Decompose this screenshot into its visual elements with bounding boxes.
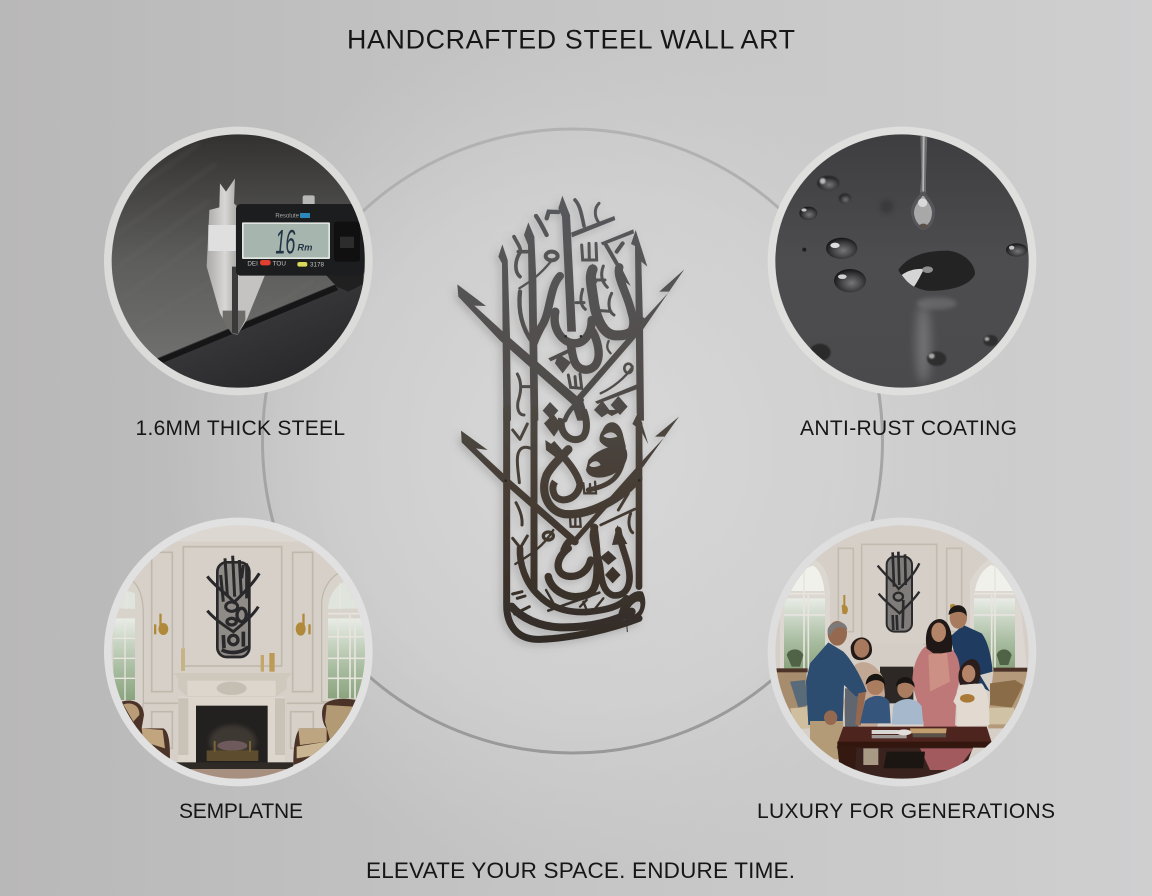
connecting ring behind the product	[262, 129, 882, 753]
mother	[912, 619, 963, 768]
label: semplatne: SEMPLATNE	[179, 800, 303, 823]
photo: family in living room	[760, 515, 1047, 795]
panel: anti-rust coating	[760, 120, 1047, 440]
mini artwork	[207, 556, 259, 657]
meem	[618, 591, 645, 621]
girl	[953, 659, 989, 727]
sofas	[776, 669, 807, 728]
caliper readout: 16	[275, 223, 295, 261]
calligraphy wall art	[457, 196, 684, 639]
caliper unit: Rm	[297, 243, 312, 253]
wall sconces and candlesticks	[154, 614, 311, 672]
label: 1.6mm thick steel: 1.6MM THICK STEEL	[136, 417, 345, 440]
mantel	[173, 673, 292, 697]
label: anti-rust coating: ANTI-RUST COATING	[800, 417, 1017, 440]
panel: luxury for generations	[757, 515, 1055, 823]
caliper brand: Resolute	[275, 213, 300, 219]
label: luxury for generations: LUXURY FOR GENERATIONS	[757, 800, 1055, 823]
closing tagline: ELEVATE YOUR SPACE. ENDURE TIME.	[366, 858, 795, 883]
caliper right button label: 3178	[310, 262, 325, 269]
grandfather	[806, 621, 867, 759]
qaf lobes	[599, 422, 626, 450]
boy left	[860, 674, 891, 723]
armchairs	[122, 700, 170, 758]
upper calligraphy	[457, 196, 684, 421]
title: HANDCRAFTED STEEL WALL ART	[347, 24, 795, 54]
photo: caliper on steel sheet	[100, 120, 380, 400]
panel: 1.6mm thick steel	[100, 120, 380, 440]
father	[949, 605, 993, 692]
coffee table with food	[837, 727, 992, 782]
boy middle	[892, 677, 923, 724]
mini artwork	[878, 552, 919, 632]
photo: water beads on coated steel	[760, 120, 1047, 400]
photo: art above fireplace	[100, 515, 380, 795]
lower calligraphy	[461, 408, 679, 639]
caliper middle button label: TOU	[273, 260, 286, 267]
panel: semplatne room scene	[100, 515, 380, 823]
grandmother	[843, 637, 885, 728]
caliper left button label: DEI	[247, 260, 258, 267]
